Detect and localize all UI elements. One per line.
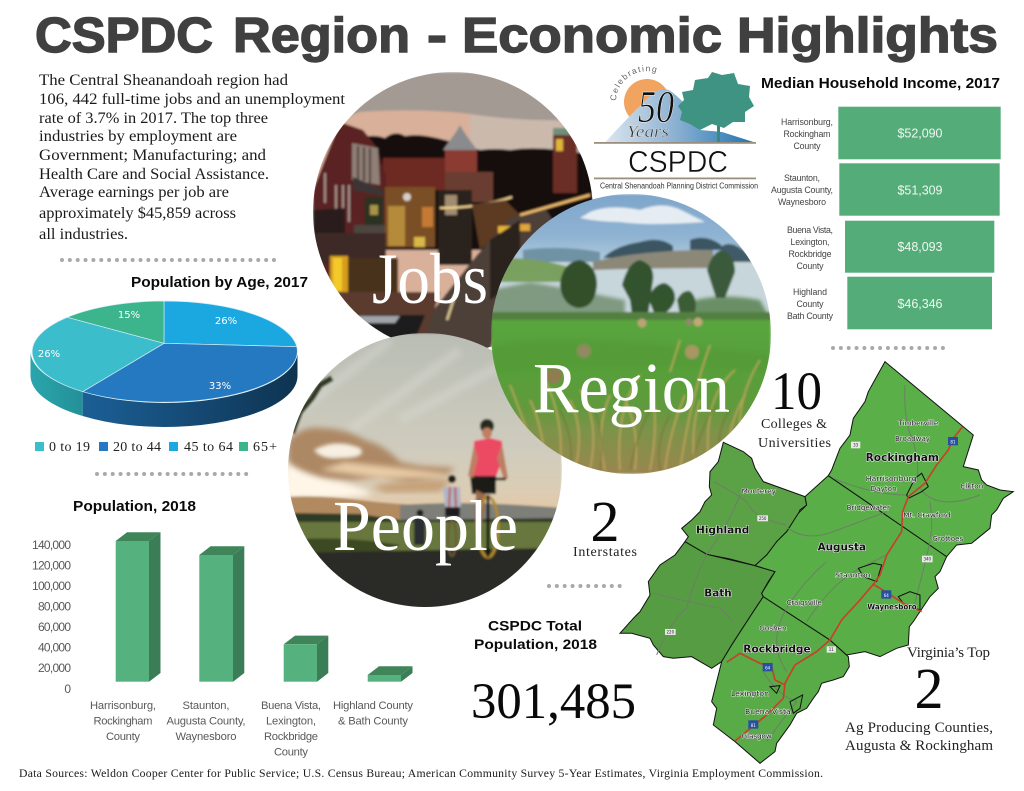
county labels: Rockbridge bbox=[743, 643, 811, 655]
category labels: County bbox=[274, 746, 308, 758]
route shields: 81 bbox=[950, 440, 956, 445]
stat: total population bbox=[471, 618, 636, 730]
pie chart: population by age bbox=[30, 301, 298, 427]
text block: regional summary: all industries. bbox=[39, 226, 128, 243]
bar: $52,090: $52,090 bbox=[898, 126, 943, 140]
bar: $51,309: Augusta County, bbox=[771, 185, 833, 195]
text block: regional summary: Average earnings per job are bbox=[39, 184, 229, 201]
stat: 10 colleges: Colleges & bbox=[761, 417, 827, 432]
logo: CSPDC 50 years: 50 bbox=[638, 81, 674, 132]
bar: $51,309: Waynesboro bbox=[778, 197, 826, 207]
town labels bbox=[731, 419, 983, 740]
stat: total population: 301,485 bbox=[471, 674, 636, 730]
town labels: Goshen bbox=[759, 625, 787, 633]
y axis labels bbox=[32, 538, 71, 696]
y axis labels: 60,000 bbox=[38, 620, 71, 634]
y axis labels: 100,000 bbox=[32, 579, 71, 593]
bar: $52,090: Harrisonburg, bbox=[781, 117, 833, 127]
stat: top ag counties: Virginia’s Top bbox=[907, 645, 990, 661]
stat: top ag counties: Ag Producing Counties, bbox=[845, 720, 993, 736]
route shields: 250 bbox=[759, 516, 767, 521]
y axis labels: 40,000 bbox=[38, 640, 71, 654]
map: CSPDC region counties bbox=[620, 362, 1013, 763]
legend: age groups: 65+ bbox=[253, 440, 277, 455]
stat: 2 interstates: Interstates bbox=[573, 545, 637, 560]
text block: regional summary: approximately $45,859 across bbox=[39, 205, 236, 222]
county: Rockingham bbox=[828, 362, 1013, 557]
route shields: 64 bbox=[884, 593, 889, 598]
town labels: Timberville bbox=[897, 419, 938, 427]
county: Highland bbox=[682, 442, 807, 566]
y axis labels: 140,000 bbox=[32, 538, 71, 552]
bar: Highland and Bath bbox=[368, 666, 412, 682]
category labels: & Bath County bbox=[338, 716, 408, 728]
text block: regional summary: The Central Sheanandoah region had bbox=[39, 72, 288, 89]
bar: $46,346: $46,346 bbox=[898, 297, 943, 311]
route shields: 11 bbox=[829, 647, 834, 652]
stat: 2 interstates: 2 bbox=[590, 489, 620, 554]
bar: $52,090: Rockingham bbox=[784, 129, 830, 139]
bar: $51,309: $51,309 bbox=[898, 184, 943, 198]
icon: tree bbox=[678, 72, 754, 143]
title: CSPDC bbox=[35, 9, 213, 63]
category labels: Rockbridge bbox=[264, 731, 318, 743]
photo circle: Jobs bbox=[313, 72, 593, 352]
county labels: Bath bbox=[704, 588, 732, 600]
bar: $52,090: County bbox=[794, 141, 821, 151]
category labels: Rockingham bbox=[94, 716, 152, 728]
category labels: Buena Vista, bbox=[261, 700, 321, 712]
label: Jobs: Jobs bbox=[372, 239, 488, 319]
Interstate 81 bbox=[735, 427, 963, 741]
town labels: Lexington bbox=[731, 690, 769, 698]
category labels: Waynesboro bbox=[176, 731, 236, 743]
town outlines bbox=[770, 473, 928, 713]
county labels bbox=[696, 452, 939, 655]
town labels: Buena Vista bbox=[745, 708, 791, 716]
y axis labels: 120,000 bbox=[32, 558, 71, 572]
county labels: Rockingham bbox=[866, 452, 939, 464]
town labels: Elkton bbox=[961, 483, 983, 491]
category labels: Lexington, bbox=[266, 716, 316, 728]
town labels: Dayton bbox=[871, 485, 897, 493]
bar: $48,093: Buena Vista, bbox=[787, 225, 833, 235]
bar: Buena Vista, Lexington, Rockbridge bbox=[284, 636, 328, 682]
bar: $48,093 bbox=[787, 221, 994, 273]
bar chart: population 2018 bbox=[32, 532, 413, 758]
bar: $48,093: Rockbridge bbox=[788, 249, 832, 259]
footer: data sources: Data Sources: Weldon Cooper Center for Public Service; U.S. Census Bureau; American Community Survey 5-Year Estimates, Virginia Employment Commission. bbox=[19, 767, 823, 780]
route shields: 340 bbox=[923, 557, 932, 562]
stat: 10 colleges: Universities bbox=[758, 436, 831, 451]
stat: top ag counties: Augusta & Rockingham bbox=[845, 738, 993, 754]
chart: median household income bbox=[771, 107, 1001, 329]
bar: $46,346 bbox=[787, 277, 992, 329]
heading: population by age: Population by Age, 2017 bbox=[131, 275, 308, 291]
bar: Staunton, Augusta, Waynesboro bbox=[199, 546, 244, 682]
photo circle: Region bbox=[491, 194, 771, 474]
title: Economic bbox=[462, 9, 722, 63]
town labels: Glasgow bbox=[742, 732, 772, 740]
stat: 2 interstates bbox=[573, 489, 637, 560]
route shields bbox=[665, 437, 958, 729]
y axis labels: 80,000 bbox=[38, 600, 71, 614]
bar: $46,346: County bbox=[796, 299, 824, 309]
town labels: Broadway bbox=[895, 435, 930, 443]
text block: regional summary: Government; Manufacturing; and bbox=[39, 147, 266, 164]
county: Rockbridge bbox=[712, 597, 849, 763]
bar: Harrisonburg, Rockingham bbox=[116, 532, 160, 682]
logo: CSPDC 50 years: Central Shenandoah Planning District Commission bbox=[600, 182, 758, 190]
logo: CSPDC 50 years: Years bbox=[627, 122, 669, 141]
stat: 10 colleges bbox=[758, 361, 831, 451]
stat: total population: CSPDC Total bbox=[488, 618, 582, 634]
icon: second cyclist bbox=[443, 475, 461, 556]
town labels: Harrisonburg bbox=[866, 475, 917, 483]
category labels bbox=[90, 700, 413, 758]
bar: $48,093: $48,093 bbox=[898, 240, 943, 254]
pie chart: population by age: 26% bbox=[215, 316, 237, 327]
bar: $52,090 bbox=[781, 107, 1001, 159]
route shields: 33 bbox=[853, 443, 859, 448]
bar: $46,346: Highland bbox=[793, 287, 827, 297]
stat: top ag counties: 2 bbox=[914, 656, 944, 721]
label: Region: Region bbox=[533, 348, 730, 428]
legend: age groups bbox=[35, 440, 277, 455]
logo: CSPDC 50 years: Celebrating bbox=[610, 65, 657, 100]
route shields: 220 bbox=[667, 630, 675, 635]
category labels: Staunton, bbox=[182, 700, 230, 712]
category labels: County bbox=[106, 731, 140, 743]
county labels: Augusta bbox=[818, 542, 866, 554]
label: People: People bbox=[333, 486, 518, 566]
text block: regional summary: industries by employment are bbox=[39, 128, 237, 145]
title bbox=[35, 9, 998, 63]
county: Augusta bbox=[755, 476, 947, 657]
bar: $48,093: Lexington, bbox=[790, 237, 830, 247]
icon: lead cyclist bbox=[468, 419, 508, 557]
category labels: Highland County bbox=[333, 700, 413, 712]
town labels: Craigsville bbox=[787, 599, 822, 607]
route shields: 64 bbox=[765, 666, 771, 671]
county labels: Waynesboro bbox=[867, 602, 917, 611]
county labels: Highland bbox=[696, 524, 749, 536]
text block: regional summary bbox=[39, 72, 346, 243]
town labels: Mt. Crawford bbox=[903, 512, 951, 520]
legend: age groups: 45 to 64 bbox=[184, 440, 233, 455]
stat: top ag counties bbox=[845, 645, 993, 754]
town labels: Bridgewater bbox=[847, 504, 890, 512]
bar: $51,309: Staunton, bbox=[784, 173, 820, 183]
category labels: Harrisonburg, bbox=[90, 700, 156, 712]
stat: total population: Population, 2018 bbox=[474, 636, 597, 652]
Interstate 64 bbox=[727, 584, 922, 685]
bar: $46,346: Bath County bbox=[787, 311, 834, 321]
town labels: Staunton bbox=[835, 571, 871, 579]
legend: age groups: 0 to 19 bbox=[49, 440, 90, 455]
logo: CSPDC 50 years: CSPDC bbox=[628, 144, 728, 179]
pie chart: population by age: 26% bbox=[38, 349, 60, 360]
pie chart: population by age: 33% bbox=[209, 381, 231, 392]
text block: regional summary: Health Care and Social Assistance. bbox=[39, 166, 269, 183]
county: Bath bbox=[620, 542, 775, 668]
bar: $48,093: County bbox=[796, 261, 824, 271]
town labels: Monterey bbox=[742, 487, 776, 495]
photo circle: People bbox=[285, 333, 562, 610]
text block: regional summary: rate of 3.7% in 2017. The top three bbox=[39, 110, 268, 127]
heading: median household income: Median Household Income, 2017 bbox=[761, 76, 1000, 92]
stat: 10 colleges: 10 bbox=[771, 361, 822, 421]
logo: CSPDC 50 years bbox=[594, 65, 758, 190]
title: Region bbox=[233, 9, 410, 63]
y axis labels: 0 bbox=[64, 682, 71, 696]
title: - bbox=[427, 9, 447, 63]
legend: age groups: 20 to 44 bbox=[113, 440, 161, 455]
heading: population 2018: Population, 2018 bbox=[73, 499, 196, 515]
local roads bbox=[653, 385, 980, 742]
bar: $51,309 bbox=[771, 163, 1000, 216]
text block: regional summary: 106, 442 full-time jobs and an unemployment bbox=[39, 91, 346, 108]
town labels: Grottoes bbox=[932, 535, 964, 543]
y axis labels: 20,000 bbox=[38, 661, 71, 675]
pie chart: population by age: 15% bbox=[118, 310, 140, 321]
title: Highlights bbox=[737, 9, 998, 63]
category labels: Augusta County, bbox=[166, 716, 246, 728]
route shields: 81 bbox=[751, 723, 756, 728]
